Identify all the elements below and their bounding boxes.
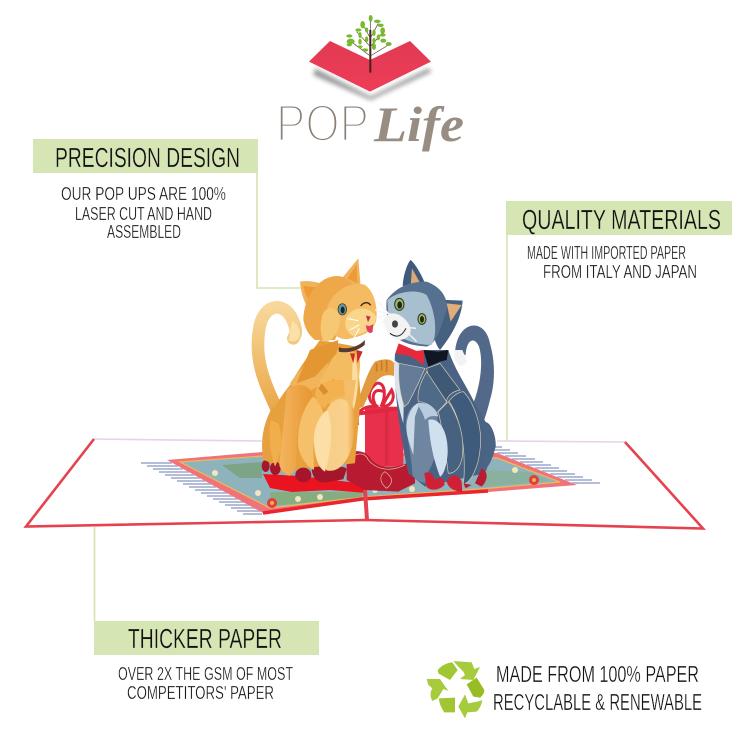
text block: ASSEMBLED: [107, 222, 181, 242]
ribbon: [357, 383, 402, 425]
collar: [339, 340, 365, 352]
panel: quality materials: [506, 201, 732, 282]
right ear: [431, 299, 463, 350]
card red edges: [26, 439, 703, 528]
card top edge: [94, 439, 625, 442]
panel: precision design: [33, 139, 258, 242]
head group: [394, 326, 496, 492]
heading band: [506, 201, 732, 235]
eyes: [395, 298, 404, 310]
red base: [347, 451, 415, 492]
logo: Pop Life: [276, 15, 464, 153]
chest white edge: [394, 360, 404, 423]
gift box: [365, 407, 403, 467]
mouth: [366, 316, 371, 322]
back of head: [303, 276, 355, 340]
tail tip: [288, 321, 300, 342]
head: [327, 284, 377, 339]
ears: [300, 281, 334, 318]
gift and red base: [347, 383, 415, 492]
center fold tab: [365, 490, 367, 520]
heading: precision design: PRECISION DESIGN: [55, 142, 240, 173]
far right slice: [482, 422, 496, 470]
body backing: [263, 340, 361, 472]
text block: [61, 184, 226, 242]
rug: [167, 452, 577, 513]
dark shadow: [423, 350, 448, 367]
whiskers: [375, 302, 417, 342]
whiskers: [347, 319, 359, 339]
icon: recycle arrows: [427, 661, 484, 718]
bow tie collar: [395, 343, 424, 365]
eyes: [338, 304, 347, 315]
text block: OUR POP UPS ARE 100%: [61, 184, 226, 204]
tail tip: [454, 350, 467, 366]
icon: red open book with tree: [309, 15, 432, 100]
head: [386, 282, 447, 347]
logo wordmark POP: POP: [276, 95, 369, 153]
pop up sculpture: two cats: [258, 258, 496, 492]
heart paws: [424, 468, 487, 492]
heading band: [33, 139, 258, 173]
torso: [290, 356, 330, 397]
leg slices: [449, 392, 481, 484]
recycling text: [493, 661, 702, 715]
tail: [455, 326, 494, 428]
text block: OVER 2X THE GSM OF MOST: [118, 664, 293, 684]
panel: thicker paper: [94, 621, 319, 703]
grey cat: [375, 260, 496, 492]
text block: LASER CUT AND HAND: [75, 204, 212, 224]
orange cat: [258, 258, 394, 482]
tail: [258, 307, 296, 420]
text block: COMPETITORS' PAPER: [127, 683, 274, 703]
text block: [527, 243, 697, 282]
leg slices: [262, 380, 356, 482]
connector lines: [94, 173, 507, 621]
logo wordmark Life: Life: [373, 96, 464, 152]
panel: recyclable: [427, 661, 702, 718]
rug fringe: [141, 447, 600, 514]
text block: [118, 664, 293, 703]
torso backing: [395, 350, 496, 487]
raised paw: [355, 359, 394, 410]
muzzle: [383, 313, 411, 340]
heading: thicker paper: THICKER PAPER: [128, 623, 282, 654]
open pop up card: [26, 258, 703, 528]
left ear: [403, 260, 425, 286]
heading band: [94, 621, 319, 655]
far paws: [262, 460, 347, 482]
